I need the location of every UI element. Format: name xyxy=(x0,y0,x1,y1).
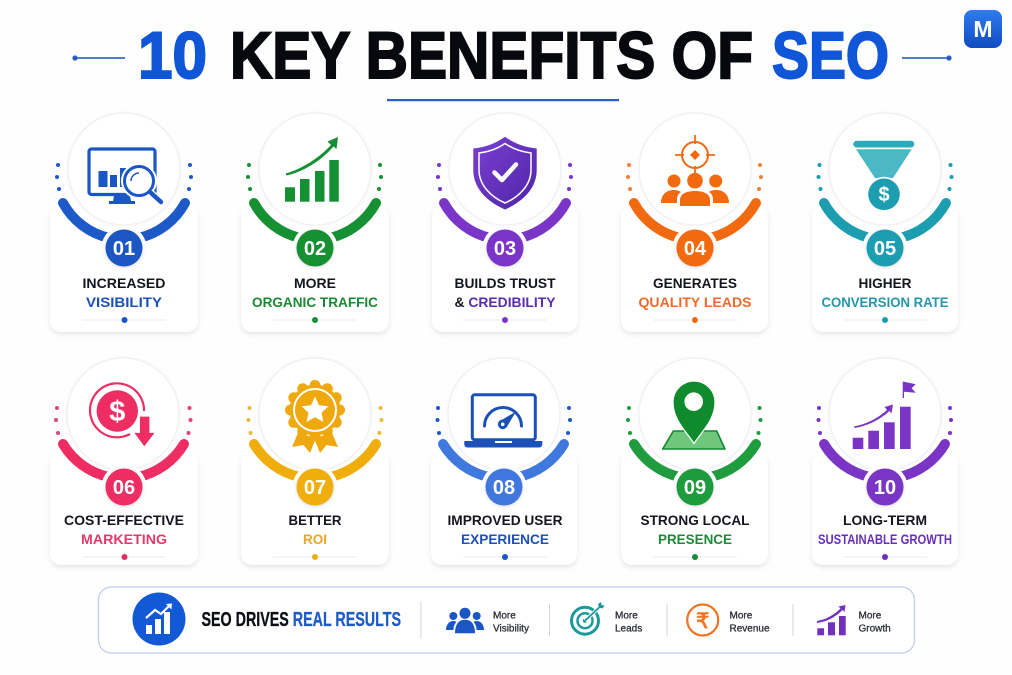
number badge: 01 xyxy=(113,238,135,260)
label: COST-EFFECTIVE xyxy=(64,512,184,528)
icon: rising bar chart xyxy=(285,137,339,202)
number badge xyxy=(672,464,718,510)
card panel xyxy=(431,452,577,565)
icon: laptop with gauge xyxy=(464,395,542,448)
icon: growth chart in blue circle xyxy=(132,592,186,646)
card panel xyxy=(812,205,958,332)
arc and dots xyxy=(626,406,762,477)
item: more growth: Growth xyxy=(858,624,891,634)
number badge xyxy=(862,226,908,270)
item: more leads: More xyxy=(615,610,638,622)
label: GENERATES xyxy=(653,275,737,291)
icon circle xyxy=(68,113,180,225)
card 10: long-term sustainable growth xyxy=(812,358,958,565)
arc and dots xyxy=(54,406,192,477)
arc and dots xyxy=(246,163,383,238)
item: more visibility: Visibility xyxy=(493,624,529,634)
item: more revenue: ₹ xyxy=(696,610,709,633)
label: STRONG LOCAL xyxy=(640,512,750,528)
label: EXPERIENCE xyxy=(461,531,549,547)
number badge: 04 xyxy=(684,238,707,260)
card 03: builds trust and credibility xyxy=(432,113,578,332)
card 06: cost-effective marketing xyxy=(50,358,198,565)
number badge xyxy=(292,226,338,270)
item: more revenue: More xyxy=(730,610,753,622)
icon circle xyxy=(449,113,561,225)
icon circle xyxy=(639,358,751,470)
logo badge: M xyxy=(973,16,993,42)
label xyxy=(82,275,166,310)
card 04: generates quality leads xyxy=(621,113,768,332)
number badge: 02 xyxy=(304,238,326,260)
arc and dots xyxy=(436,406,572,477)
label: VISIBILITY xyxy=(86,294,163,310)
card panel xyxy=(241,205,389,332)
card 01: increased visibility xyxy=(50,113,198,332)
item: more visibility xyxy=(446,608,529,634)
title: 10 xyxy=(138,18,207,92)
icon: dollar coin with down arrow: $ xyxy=(109,396,125,428)
number badge xyxy=(862,464,908,510)
number badge: 08 xyxy=(493,477,515,499)
icon: bars, arrow and flag xyxy=(853,382,916,449)
logo badge xyxy=(964,10,1002,48)
label: ROI xyxy=(303,531,327,547)
number badge: 07 xyxy=(304,477,326,499)
label xyxy=(638,275,752,310)
label xyxy=(252,275,378,310)
number badge: 03 xyxy=(494,238,516,260)
item: more visibility: More xyxy=(493,610,516,622)
bottom results bar xyxy=(98,587,914,653)
label: BETTER xyxy=(288,512,342,528)
icon circle xyxy=(829,113,941,225)
headline: SEO DRIVES REAL RESULTS xyxy=(202,609,401,631)
label: CONVERSION RATE xyxy=(822,294,948,310)
label: BUILDS TRUST xyxy=(454,275,556,291)
card 09: strong local presence xyxy=(621,358,768,565)
icon: monitor with magnifier xyxy=(89,149,161,204)
card panel xyxy=(621,452,768,565)
number badge xyxy=(292,464,338,510)
label xyxy=(64,512,184,547)
label: PRESENCE xyxy=(658,531,732,547)
title: SEO xyxy=(772,18,889,92)
number badge xyxy=(102,226,146,270)
label: MARKETING xyxy=(81,531,167,547)
icon circle xyxy=(829,358,941,470)
label: SUSTAINABLE GROWTH xyxy=(818,531,952,547)
number badge: 06 xyxy=(113,477,135,499)
number badge: 05 xyxy=(874,238,896,260)
arc and dots xyxy=(816,163,954,238)
card 05: higher conversion rate xyxy=(812,113,958,332)
label: IMPROVED USER xyxy=(448,512,562,528)
card 08: improved user experience xyxy=(431,358,577,565)
number badge xyxy=(102,464,146,510)
label: HIGHER xyxy=(858,275,912,291)
item: more growth: More xyxy=(858,610,882,622)
label xyxy=(822,275,948,310)
card panel xyxy=(621,205,768,332)
label: & CREDIBILITY xyxy=(454,294,556,310)
item: more growth xyxy=(817,605,891,635)
label xyxy=(454,275,556,310)
icon: funnel with coin xyxy=(853,141,914,212)
icon circle xyxy=(67,358,179,470)
item: more leads: Leads xyxy=(615,624,642,634)
icon: dollar coin with down arrow xyxy=(90,383,156,447)
label xyxy=(288,512,342,547)
label xyxy=(818,512,952,547)
item: more revenue xyxy=(687,604,770,636)
number badge xyxy=(482,464,526,510)
arc and dots xyxy=(816,406,953,477)
icon circle xyxy=(259,113,371,225)
label: LONG-TERM xyxy=(843,512,927,528)
icon: award rosette xyxy=(285,380,345,453)
number badge: 10 xyxy=(874,477,896,499)
bar panel xyxy=(98,587,914,653)
card 07: better ROI xyxy=(241,358,389,565)
label: ORGANIC TRAFFIC xyxy=(252,294,378,310)
label xyxy=(640,512,750,547)
card 02: more organic traffic xyxy=(241,113,389,332)
icon circle xyxy=(639,113,751,225)
title: KEY BENEFITS OF xyxy=(230,18,753,92)
icon: location pin on map xyxy=(663,381,725,449)
icon circle xyxy=(259,358,371,470)
label: INCREASED xyxy=(82,275,166,291)
item: more revenue: Revenue xyxy=(730,624,770,634)
number badge xyxy=(672,226,718,270)
item: more leads xyxy=(572,602,642,634)
label: MORE xyxy=(294,275,336,291)
card panel xyxy=(50,452,198,565)
label: QUALITY LEADS xyxy=(638,294,752,310)
arc and dots xyxy=(55,163,193,238)
icon: target over people xyxy=(661,135,729,206)
card panel xyxy=(432,205,578,332)
card panel xyxy=(812,452,958,565)
arc and dots xyxy=(436,163,573,238)
card panel xyxy=(241,452,389,565)
card panel xyxy=(50,205,198,332)
number badge xyxy=(482,226,528,270)
arc and dots xyxy=(626,163,763,238)
icon: funnel with coin: $ xyxy=(878,184,890,206)
label xyxy=(448,512,562,547)
icon circle xyxy=(448,358,560,470)
number badge: 09 xyxy=(684,477,706,499)
icon: shield with check xyxy=(473,137,537,210)
arc and dots xyxy=(246,406,384,477)
